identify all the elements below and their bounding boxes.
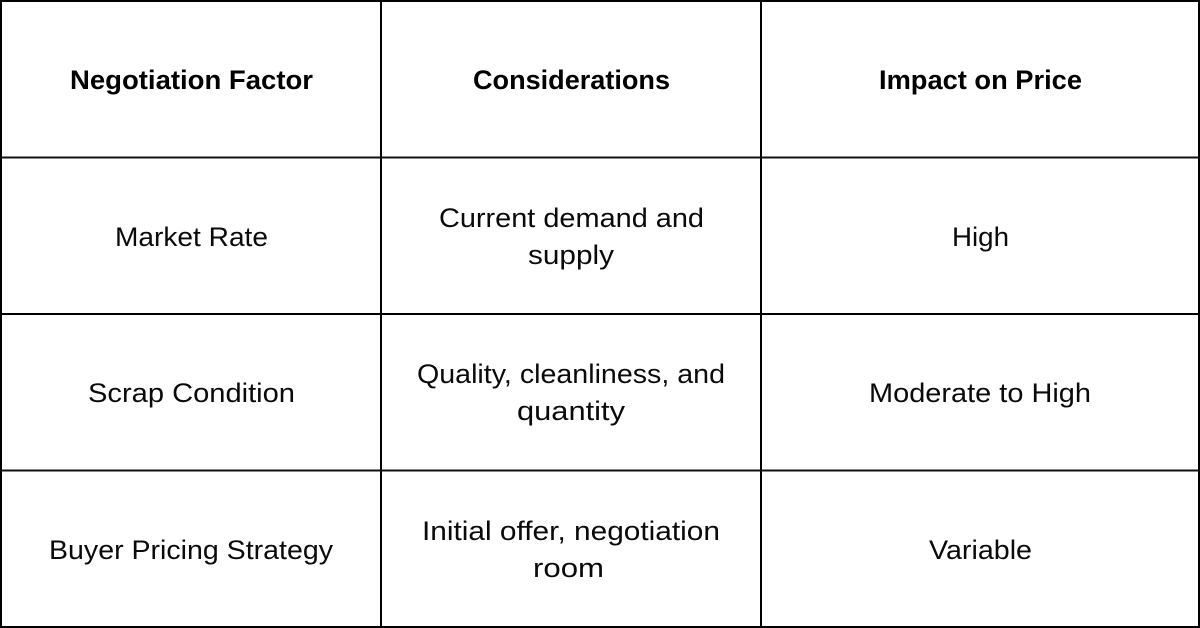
heading: Considerations: Considerations — [473, 65, 670, 95]
considerations: current demand and supply: Current demand and — [439, 203, 704, 233]
header row — [70, 65, 1082, 95]
considerations: initial offer, negotiation room — [422, 516, 720, 583]
row: Buyer Pricing Strategy — [49, 516, 1032, 583]
heading: Impact on Price: Impact on Price — [879, 65, 1082, 95]
considerations: quality, cleanliness, and quantity: quantity — [517, 396, 626, 426]
considerations: initial offer, negotiation room: room — [533, 553, 604, 583]
factor: Buyer Pricing Strategy: Buyer Pricing Strategy — [49, 535, 334, 565]
considerations: current demand and supply: supply — [528, 240, 615, 270]
considerations: quality, cleanliness, and quantity: Quality, cleanliness, and — [417, 359, 725, 389]
heading: Negotiation Factor: Negotiation Factor — [70, 65, 313, 95]
row: Market Rate — [115, 203, 1009, 270]
considerations: quality, cleanliness, and quantity — [417, 359, 725, 426]
considerations: current demand and supply — [439, 203, 704, 270]
factor: Market Rate: Market Rate — [115, 222, 268, 252]
impact: Moderate to High: Moderate to High — [869, 378, 1091, 408]
impact: Variable: Variable — [929, 535, 1032, 565]
row: Scrap Condition — [88, 359, 1091, 426]
considerations: initial offer, negotiation room: Initial offer, negotiation — [422, 516, 720, 546]
factor: Scrap Condition: Scrap Condition — [88, 378, 295, 408]
impact: High: High — [952, 222, 1009, 252]
